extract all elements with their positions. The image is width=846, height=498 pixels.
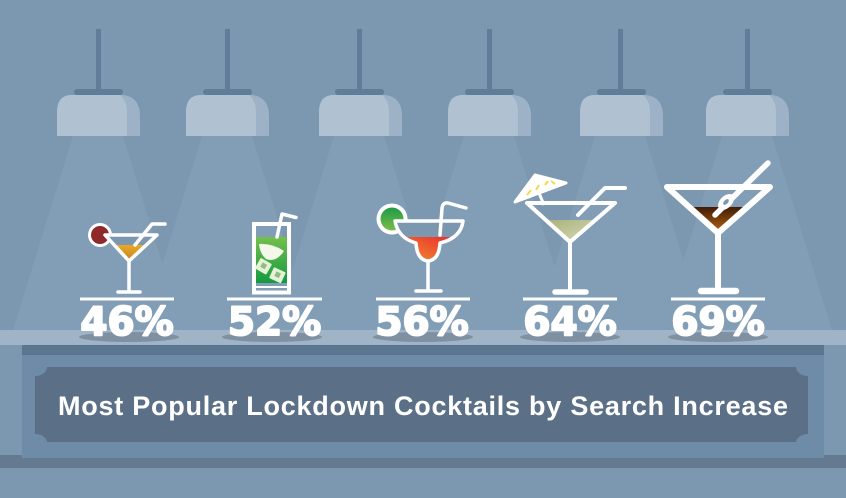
bar counter bbox=[0, 330, 846, 468]
drink 1: 46% bbox=[79, 223, 179, 345]
drink 4: 64% bbox=[515, 175, 625, 345]
lamp 4 bbox=[448, 29, 531, 136]
drink 3: 56% bbox=[373, 203, 473, 345]
title: Most Popular Lockdown Cocktails by Search Increase bbox=[58, 391, 788, 421]
drink 2: 52% bbox=[222, 214, 322, 345]
lamp 1 bbox=[57, 29, 140, 136]
lamp 3 bbox=[319, 29, 402, 136]
light beams bbox=[13, 136, 832, 330]
drink 5: 69% bbox=[667, 163, 770, 345]
drink 2: 52%: 52% bbox=[228, 300, 321, 345]
drink 5: 69%: 69% bbox=[671, 300, 765, 345]
drink 4: 64%: 64% bbox=[523, 300, 617, 345]
lamp 2 bbox=[186, 29, 269, 136]
lamp 5 bbox=[580, 29, 663, 136]
drink 3: 56%: 56% bbox=[375, 300, 469, 345]
drink 1: 46%: 46% bbox=[80, 300, 174, 345]
plaque with title bbox=[35, 367, 808, 442]
lamp 6 bbox=[706, 29, 789, 136]
